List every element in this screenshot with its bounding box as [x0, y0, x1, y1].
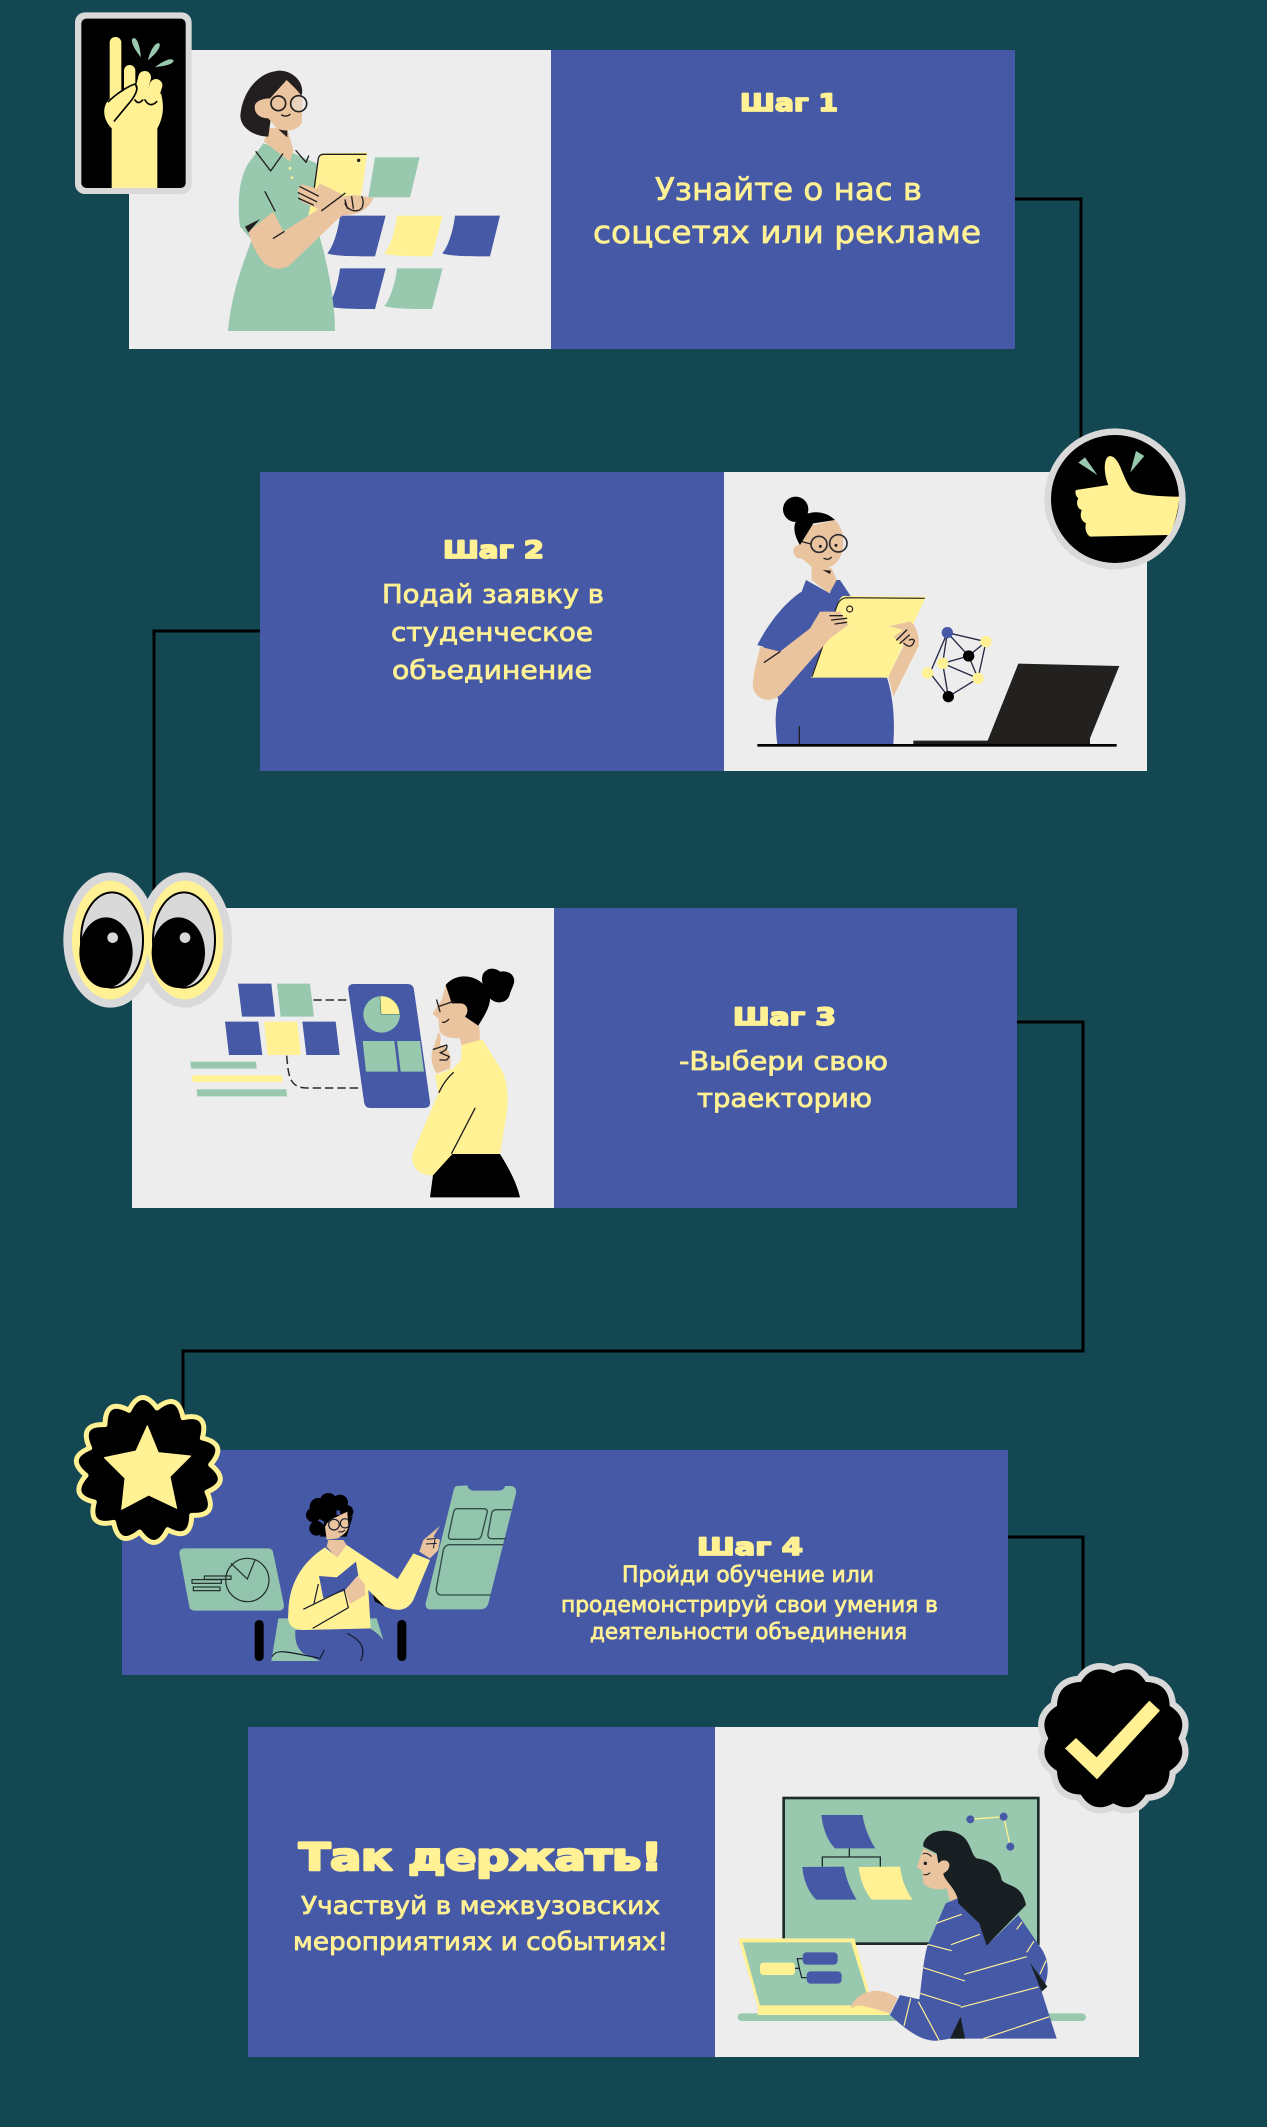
step 2 description [382, 580, 604, 686]
step 4 description: Пройди обучение или [622, 1563, 874, 1588]
illustration: woman with tablet, molecule and laptop [753, 497, 1119, 747]
panel: step 4 [76, 1398, 1008, 1675]
final heading: Так держать! [299, 1836, 662, 1879]
icon: cartoon eyes [63, 872, 232, 1008]
step 4 description: деятельности объединения [590, 1620, 907, 1645]
step 3 text area [554, 908, 1017, 1208]
final description: мероприятиях и событиях! [293, 1927, 668, 1956]
icon: star badge [76, 1398, 220, 1542]
step 2 image area [724, 472, 1147, 771]
step 2 heading: Шаг 2 [443, 536, 544, 564]
connector lines [154, 199, 1083, 1700]
panel: final step [248, 1669, 1182, 2057]
final description [293, 1891, 668, 1956]
icon: pointing hand card [75, 12, 192, 194]
step 4 background [122, 1450, 1008, 1675]
illustration: woman at laptop and board [738, 1798, 1086, 2041]
step 1 description: соцсетях или рекламе [593, 215, 981, 251]
step 3 heading: Шаг 3 [733, 1003, 836, 1031]
step 3 description [679, 1047, 888, 1114]
step 4 heading: Шаг 4 [697, 1533, 803, 1561]
icon: thumbs up badge [1044, 428, 1186, 570]
step 1 image area [129, 50, 552, 349]
step 3 image area [132, 908, 555, 1208]
illustration: woman with tablet and sticky notes [228, 71, 500, 331]
step 4 description [561, 1563, 938, 1645]
panel: step 1 [75, 12, 1015, 349]
step 1 description: Узнайте о нас в [655, 172, 922, 208]
illustration: person with screens [179, 1485, 516, 1661]
icon: check mark badge [1044, 1669, 1182, 1807]
step 1 text area [551, 50, 1015, 349]
final step image area [715, 1727, 1139, 2057]
step 3 description: траекторию [697, 1084, 872, 1114]
step 2 description: студенческое [391, 618, 593, 648]
final description: Участвуй в межвузовских [301, 1891, 660, 1920]
step 4 description: продемонстрируй свои умения в [561, 1593, 938, 1618]
step 1 heading: Шаг 1 [740, 89, 838, 117]
illustration: woman with phone dashboard and blocks [190, 969, 520, 1197]
step 2 description: объединение [392, 656, 592, 686]
panel: step 2 [260, 428, 1186, 771]
step 2 text area [260, 472, 725, 771]
step 2 description: Подай заявку в [382, 580, 604, 610]
panel: step 3 [63, 872, 1017, 1208]
final step text area [248, 1727, 716, 2057]
step 3 description: -Выбери свою [679, 1047, 888, 1077]
step 1 description [593, 172, 981, 251]
